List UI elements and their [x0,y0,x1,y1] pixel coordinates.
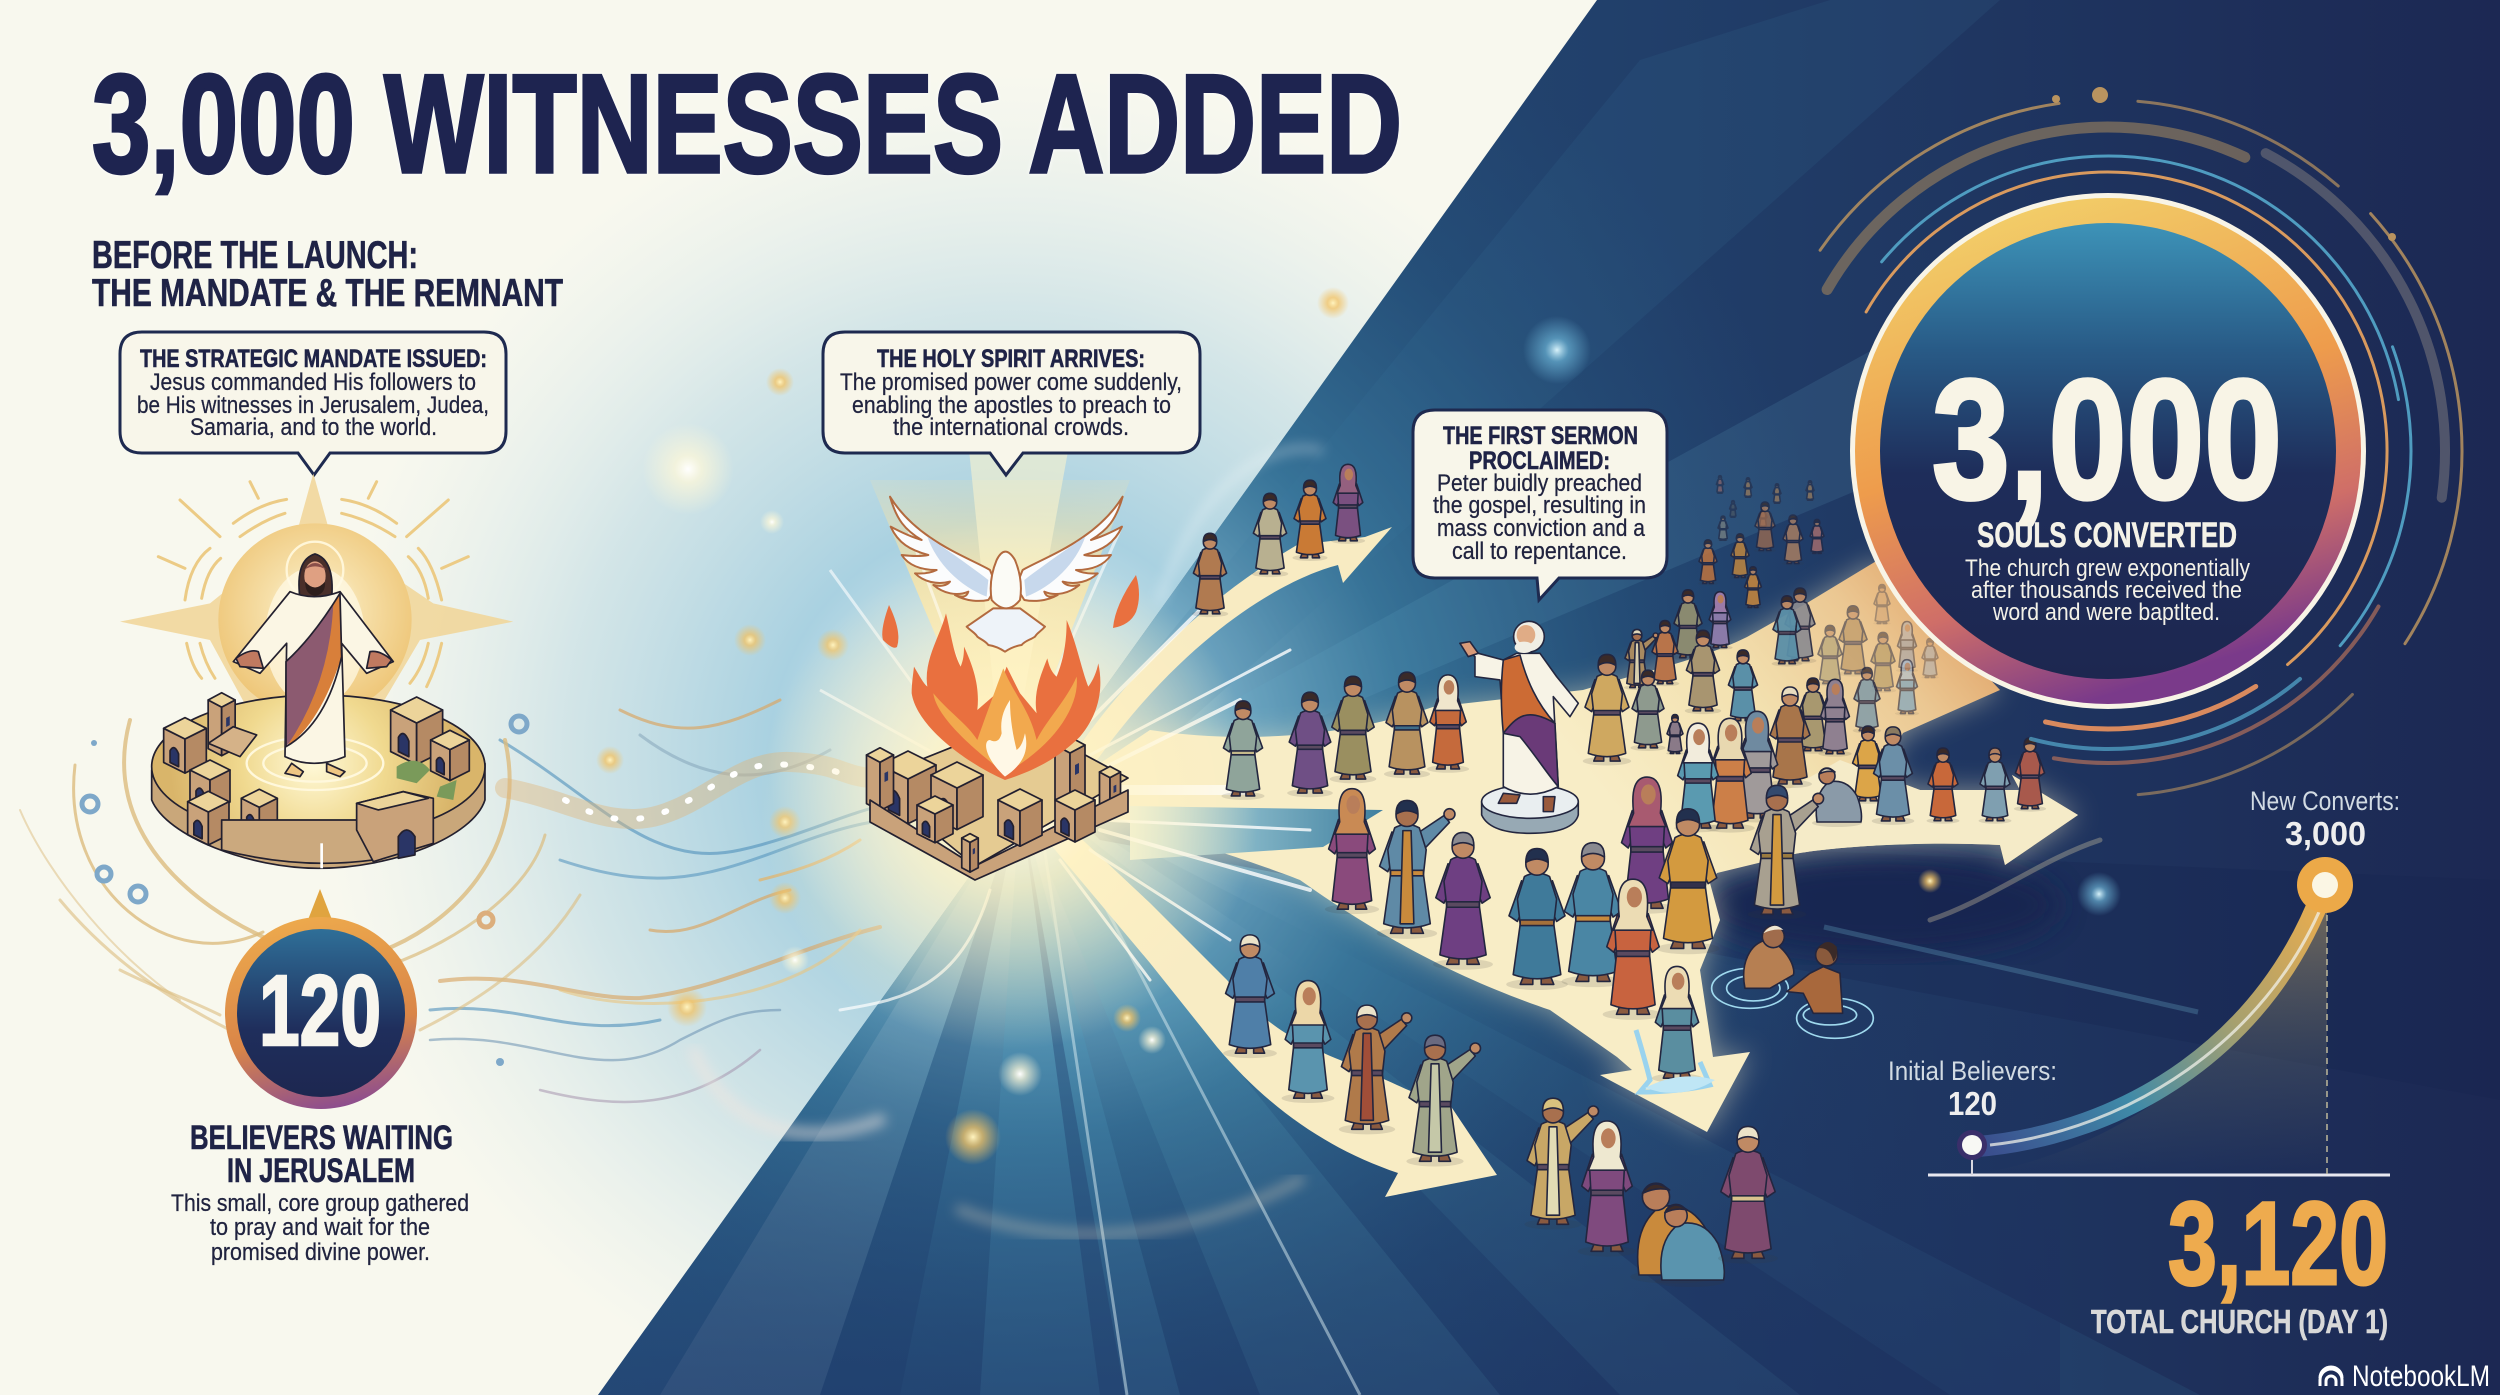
stat: total church [2091,1178,2388,1340]
title: 3,000 WITNESSES ADDED [92,45,1402,202]
end point [2297,857,2353,913]
pedestal [1482,785,1578,833]
text block: believers waiting: This small, core group gathered [171,1190,469,1217]
crowd: bottom group on dark field [1524,1098,1778,1287]
background: central light glow [405,151,1685,1322]
bright streaks from the fortress [1060,610,1310,980]
arrow: horizontal branch to the right [1770,760,2078,865]
left wing [890,497,997,601]
Peter preaching on a pedestal [1460,621,1578,833]
text block: believers waiting [171,1119,469,1266]
fortress [866,720,1128,880]
big number: 3,000 [1932,345,2282,535]
Jesus figure [233,554,393,777]
callout: first sermon [1413,410,1667,600]
description: word and were baptlted. [1992,599,2220,626]
callout: first sermon: the gospel, resulting in [1433,492,1646,519]
text block: believers waiting: IN JERUSALEM [227,1152,415,1190]
stat circle: 3,000 souls converted [1850,193,2366,709]
baptism scene [1712,926,1873,1038]
dotted gold stream between city and fortress [505,762,870,819]
label: initial believers: Initial Believers: [1888,1056,2057,1086]
light beam above the dove [820,440,1130,800]
radiant halo and star [120,473,513,717]
floating flame tongues [882,575,1139,648]
label: new converts: New Converts: [2250,786,2400,816]
section heading [92,234,563,315]
description: after thousands received the [1971,577,2242,604]
callout: first sermon: Peter buidly preached [1437,470,1642,497]
right wing [1016,497,1123,601]
stat: total church: TOTAL CHURCH (DAY 1) [2091,1303,2388,1340]
stat badge: 120: 120 [259,955,381,1067]
water figure: woman entering water [1636,966,1715,1093]
round city base [152,695,485,868]
growth chart: 120 [1948,1085,1997,1122]
axis [1928,1174,2390,1176]
text block: believers waiting: BELIEVERS WAITING [190,1119,453,1157]
burst glow behind the fortress [760,550,1260,1050]
description: The church grew exponentially [1965,555,2250,582]
callout: holy spirit arrives: the international crowds. [893,414,1129,441]
curve [1972,885,2325,1147]
concentric ripples around the city [20,720,580,1030]
callout: strategic mandate: Samaria, and to the world. [190,414,437,441]
swoosh arcs [694,449,2100,1234]
guides [2326,915,2328,1175]
callout: first sermon: call to repentance. [1452,538,1627,565]
growth chart: 3,000 [2285,815,2366,852]
orbit arcs around the 3,000 circle [1608,0,2500,951]
crowd: right of Peter [1583,590,2046,833]
flames [912,613,1100,780]
callout: strategic mandate: Jesus commanded His followers to [150,369,476,396]
arrow: main crowd band [1060,560,2078,1132]
stat badge: 120 [225,889,417,1109]
stat: total church: 3,120 [2168,1178,2388,1310]
small ring markers [82,716,527,1066]
shaded area under curve [1972,885,2327,1175]
background: radiating light rays [560,0,2500,1395]
growth chart [1888,786,2400,1175]
callout: strategic mandate: THE STRATEGIC MANDATE ISSUED: [140,345,487,373]
callout: strategic mandate: be His witnesses in Jerusalem, Judea, [137,392,489,419]
light arrows: cream crowd path glow [1060,560,2078,1132]
crowd: foreground listeners [1325,777,1824,1020]
inlet between arrows [1130,806,1383,860]
label: SOULS CONVERTED [1977,516,2237,555]
section heading: THE MANDATE & THE REMNANT [92,272,563,315]
Peter figure [1460,621,1578,812]
arrow: top branch [1080,527,1392,770]
crowd: left of Peter [1221,672,1469,800]
flowing wave lines [430,700,990,1102]
callout: first sermon: PROCLAIMED: [1469,447,1610,475]
text block: believers waiting: promised divine power. [211,1239,430,1266]
callout: holy spirit arrives [823,332,1200,475]
icon: Jesus standing on the city of Jerusalem [120,473,513,868]
callout: first sermon: mass conviction and a [1437,515,1646,542]
section heading: BEFORE THE LAUNCH: [92,234,418,277]
glow orbs [596,287,2121,1165]
crowd: distant faded figures [1698,476,1939,733]
callout: first sermon: THE FIRST SERMON [1443,422,1638,450]
start point [1957,1130,1987,1160]
icon: fortress with flames and dove [866,497,1139,880]
callout: strategic mandate [120,332,506,475]
description [1965,555,2250,626]
city buildings [164,693,469,868]
callout: holy spirit arrives: THE HOLY SPIRIT ARRIVES: [877,345,1145,373]
text block: believers waiting: to pray and wait for the [210,1214,430,1241]
crowd: top arrow group [1192,464,1365,617]
callout: holy spirit arrives: enabling the apostles to preach to [852,392,1171,419]
background: navy diagonal panel [598,0,2500,1395]
callout: holy spirit arrives: The promised power come suddenly, [840,369,1182,396]
dove [890,497,1123,652]
arrow: lower branch [1030,800,1497,1197]
crowd: lower arrow group [1223,935,1480,1166]
